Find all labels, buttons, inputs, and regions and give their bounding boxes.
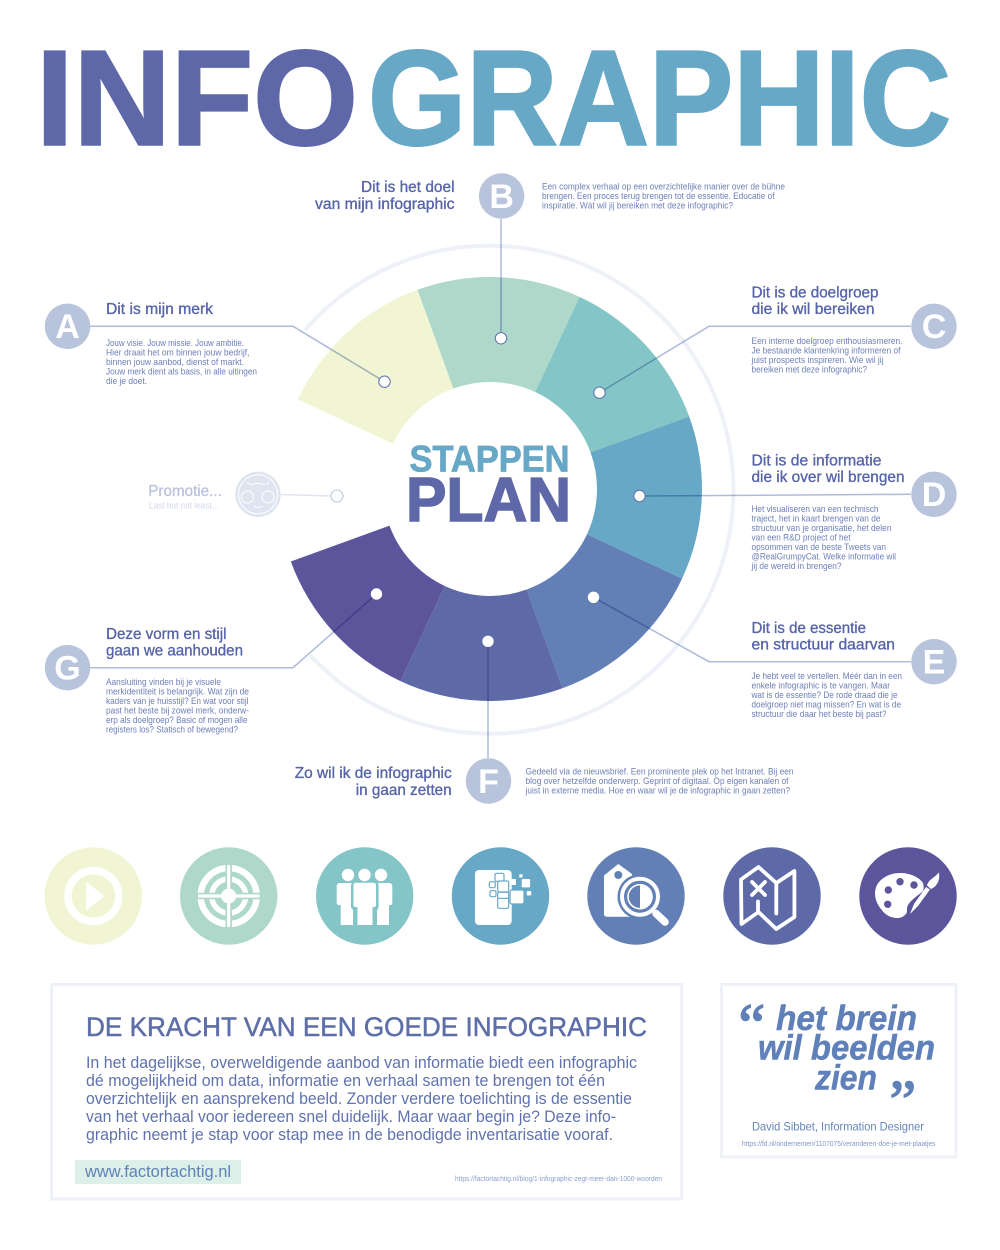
step C: doelgroep: die ik wil bereiken	[752, 301, 874, 318]
website tag	[75, 1160, 241, 1184]
step B: doel: van mijn infographic	[315, 196, 454, 213]
title: INFO	[36, 22, 358, 174]
step E: essentie: E	[923, 644, 945, 682]
step G: vorm en stijl: Deze vorm en stijl	[106, 626, 226, 643]
step D: informatie: Dit is de informatie	[752, 453, 882, 470]
icon: phone with pixels	[452, 847, 549, 945]
step D: informatie: die ik over wil brengen	[752, 469, 904, 486]
step D: informatie: jij de wereld in brengen?	[751, 561, 842, 571]
step F: inzet	[295, 758, 794, 804]
step A: merk: Jouw merk dient als basis, in alle uitingen	[106, 366, 257, 376]
step E: essentie: wat is de essentie? De rode draad die je	[751, 690, 898, 700]
step E: essentie: enkele infographic is te vangen. Maar	[752, 680, 890, 690]
quote text	[758, 999, 935, 1097]
icon: target	[180, 847, 277, 945]
panel text block: van het verhaal voor iedereen snel duidelijk. Maar waar begin je? Deze info-	[86, 1107, 616, 1126]
step E: essentie	[751, 620, 957, 719]
quote marks: ”	[890, 1068, 916, 1134]
panel text block: graphic neemt je stap voor stap mee in de benodigde inventarisatie vooraf.	[86, 1125, 613, 1144]
step D: informatie: van een R&D project of het	[752, 532, 851, 542]
icon: paint palette	[859, 847, 957, 945]
step E: essentie: en structuur daarvan	[752, 637, 895, 654]
source url: https://factortachtig.nl/blog/1-infographic-zegt-meer-dan-1000-woorden	[455, 1176, 662, 1183]
outer ring	[305, 246, 733, 734]
panel text block	[86, 1053, 637, 1144]
panel: quote	[722, 984, 956, 1157]
step F: inzet: Zo wil ik de infographic	[295, 765, 452, 782]
step B: doel: B	[489, 178, 514, 216]
panel text block: overzichtelijk en aansprekend beeld. Zonder verdere toelichting is de essentie	[86, 1089, 632, 1108]
promotie step: Promotie...	[148, 483, 222, 500]
step D: informatie: opsommen van de beste Tweets van	[752, 542, 886, 552]
step E: essentie: doelgroep niet mag missen? En wat is de	[752, 700, 901, 710]
step A: merk: Dit is mijn merk	[106, 301, 214, 318]
step B: doel: brengen. Een proces terug brengen tot de essentie. Educatie of	[542, 191, 775, 201]
step E: essentie: structuur die daar het beste bij past?	[752, 709, 886, 719]
panel text block: dé mogelijkheid om data, informatie en verhaal samen te brengen tot één	[86, 1071, 605, 1090]
quote author: David Sibbet, Information Designer	[752, 1120, 924, 1134]
step B: doel: inspiratie. Wát wil jij bereiken met deze infographic?	[542, 200, 733, 210]
icon: tag with magnifier	[587, 847, 685, 945]
step B: doel	[315, 173, 785, 219]
step F: inzet: juist in externe media. Hoe en waar wil je de infographic in gaan zetten?	[525, 786, 790, 796]
promotie step	[148, 472, 281, 517]
step G: vorm en stijl: gaan we aanhouden	[106, 643, 243, 660]
step G: vorm en stijl: erp als doelgroep? Basic of mogen alle	[106, 715, 248, 725]
icon: people group	[316, 847, 413, 945]
step C: doelgroep: Dit is de doelgroep	[752, 284, 879, 302]
step A: merk: binnen jouw aanbod, dienst of markt.	[106, 357, 244, 367]
step G: vorm en stijl: G	[54, 650, 81, 688]
step C: doelgroep: Je bestaande klantenkring informeren of	[752, 346, 901, 356]
step F: inzet: in gaan zetten	[356, 782, 452, 799]
segmented wheel chart	[291, 277, 702, 701]
center title: stappenplan: PLAN	[406, 466, 571, 535]
step D: informatie: D	[922, 476, 946, 514]
step B: doel: Dit is het doel	[361, 179, 454, 196]
quote marks	[738, 992, 916, 1134]
step C: doelgroep	[751, 284, 957, 374]
website tag: www.factortachtig.nl	[84, 1163, 231, 1181]
step C: doelgroep: bereiken met deze infographic?	[752, 364, 867, 374]
panel text block: In het dagelijkse, overweldigende aanbod van informatie biedt een infographic	[86, 1053, 637, 1072]
step D: informatie: @RealGrumpyCat. Welke informatie wil	[752, 552, 896, 562]
step G: vorm en stijl: Aansluiting vinden bij je visuele	[106, 677, 221, 687]
panel heading: DE KRACHT VAN EEN GOEDE INFOGRAPHIC	[86, 1012, 647, 1042]
step A: merk: A	[55, 308, 80, 346]
step D: informatie: structuur van je organisatie, het delen	[752, 523, 892, 533]
title: GRAPHIC	[368, 22, 951, 174]
quote text: het brein	[776, 999, 917, 1038]
step B: doel: Een complex verhaal op een overzichtelijke manier over de bühne	[542, 182, 785, 192]
step G: vorm en stijl: registers los? Statisch of bewegend?	[106, 724, 238, 734]
icon: play	[45, 847, 142, 945]
step F: inzet: Gedeeld via de nieuwsbrief. Een prominente plek op het Intranet. Bij een	[526, 766, 794, 776]
step F: inzet: blog over hetzelfde onderwerp. Geprint of digitaal. Op eigen kanalen of	[526, 776, 789, 786]
promotie step: Last but not least...	[149, 500, 218, 510]
step G: vorm en stijl	[45, 626, 249, 734]
title	[36, 22, 951, 174]
step A: merk: Hier draait het om binnen jouw bedrijf,	[106, 348, 250, 358]
center title: stappenplan: STAPPEN	[410, 438, 570, 480]
step C: doelgroep: juist prospects inspireren. Wie wil jij	[751, 355, 884, 365]
step E: essentie: Dit is de essentie	[752, 620, 866, 637]
step G: vorm en stijl: past het beste bij zowel merk, onderw-	[106, 706, 249, 716]
step C: doelgroep: C	[922, 308, 946, 346]
step D: informatie: Het visualiseren van een technisch	[752, 504, 878, 514]
connector dots	[331, 333, 645, 647]
quote text: zien	[814, 1058, 877, 1097]
step A: merk: die je doet.	[106, 376, 147, 386]
step A: merk: Jouw visie. Jouw missie. Jouw ambitie.	[106, 338, 244, 348]
step E: essentie: Je hebt veel te vertellen. Méér dan in een	[752, 671, 902, 681]
step C: doelgroep: Een interne doelgroep enthousiasmeren.	[752, 336, 902, 346]
connector lines	[90, 219, 911, 758]
panel: de kracht van een goede infographic	[52, 984, 682, 1199]
step D: informatie: traject, het in kaart brengen van de	[752, 514, 880, 524]
quote source url: https://fd.nl/ondernemen/1107075/veranderen-doe-je-met-plaatjes	[742, 1141, 936, 1148]
quote text: wil beelden	[758, 1028, 935, 1067]
step D: informatie	[751, 453, 957, 571]
step A: merk	[45, 301, 257, 386]
step G: vorm en stijl: merkidentiteit is belangrijk. Wat zijn de	[106, 686, 249, 696]
quote marks: “	[738, 992, 765, 1058]
step G: vorm en stijl: kaders van je huisstijl? En wat voor stijl	[106, 696, 248, 706]
step F: inzet: F	[478, 763, 499, 801]
icon: treasure map	[723, 847, 821, 945]
